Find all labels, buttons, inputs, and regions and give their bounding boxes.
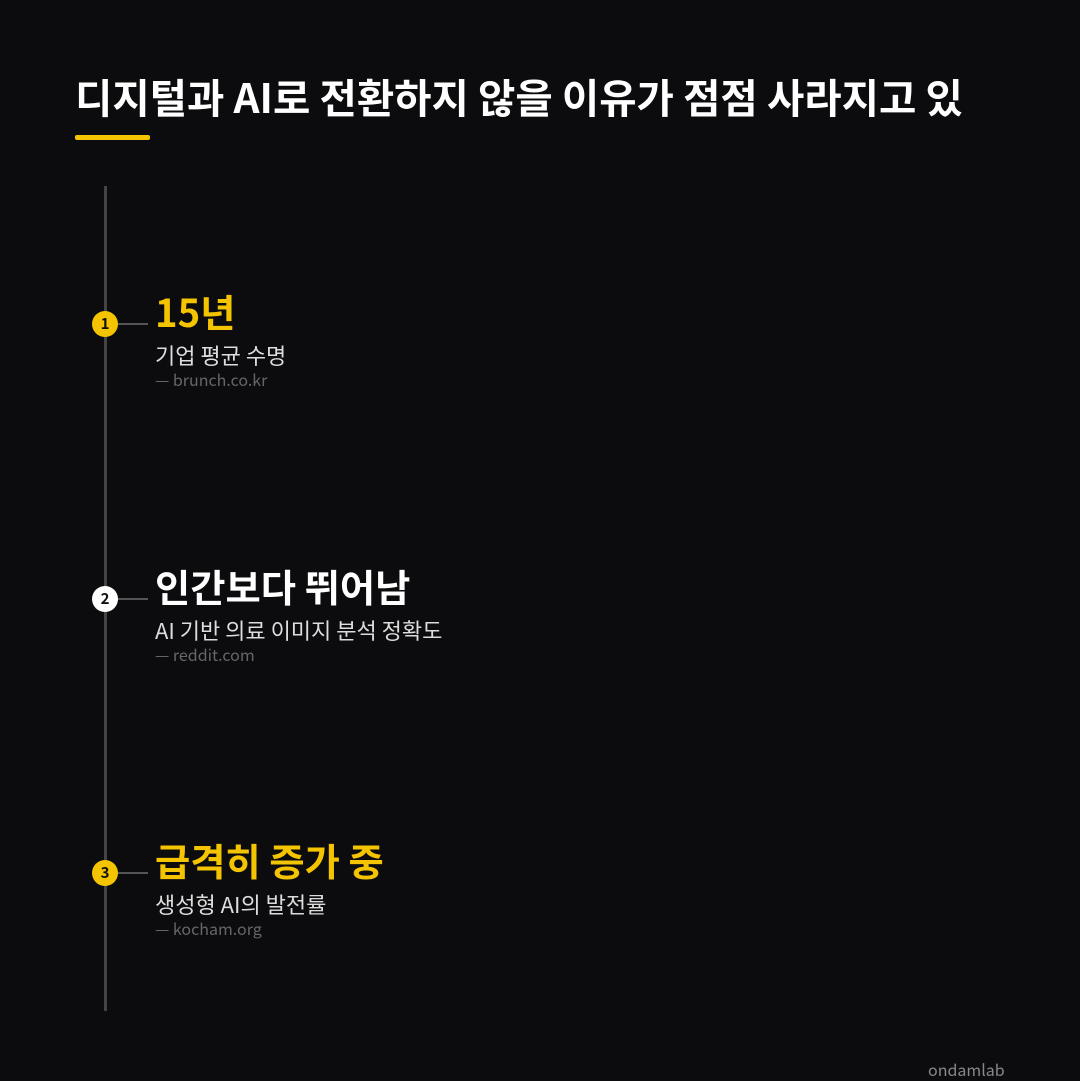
connector 2: [118, 598, 148, 600]
headline 1: 15년: [155, 284, 235, 339]
label 2: AI 기반 의료 이미지 분석 정확도: [155, 614, 442, 646]
item 2: [92, 559, 442, 666]
timeline line: [104, 186, 107, 1011]
label 1: 기업 평균 수명: [155, 339, 286, 371]
connector 1: [118, 323, 148, 325]
item 3: [92, 833, 384, 940]
headline 3: 급격히 증가 중: [155, 833, 384, 888]
marker 3: [92, 860, 118, 886]
marker 2: [92, 586, 118, 612]
marker 3: 3: [101, 862, 109, 883]
title underline: [75, 135, 150, 140]
source 2: — reddit.com: [155, 642, 255, 666]
brand footer: ondamlab: [928, 1057, 1005, 1081]
headline 2: 인간보다 뛰어남: [155, 559, 410, 614]
source 1: — brunch.co.kr: [155, 367, 267, 391]
marker 2: 2: [101, 588, 109, 609]
marker 1: 1: [101, 313, 109, 334]
source 3: — kocham.org: [155, 916, 262, 940]
title: 디지털과 AI로 전환하지 않을 이유가 점점 사라지고 있: [75, 66, 963, 125]
item 1: [92, 284, 286, 391]
label 3: 생성형 AI의 발전률: [155, 888, 326, 920]
marker 1: [92, 311, 118, 337]
connector 3: [118, 872, 148, 874]
